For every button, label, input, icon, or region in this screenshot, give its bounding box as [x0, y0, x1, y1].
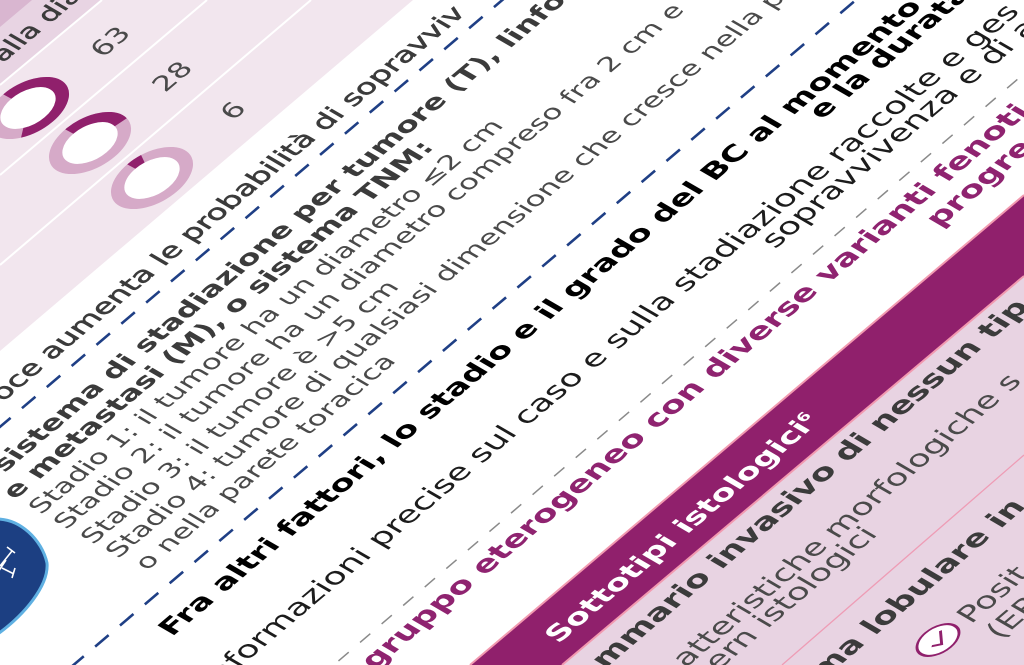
- heading: TNM staging line 2: e metastasi (M), o sistema TNM:: [0, 136, 440, 503]
- icon: blue badge: [0, 519, 47, 636]
- donut chart: 63 percent: [0, 73, 76, 143]
- subtype divider: [782, 455, 1024, 665]
- statement: staging factors line 1: Fra altri fattori, lo stadio e il grado del BC al momento: [151, 0, 929, 640]
- stage 1: Stadio 1: il tumore ha un diametro ≤2 cm: [22, 115, 510, 518]
- donut chart: 28 percent: [42, 108, 138, 178]
- stage 2: Stadio 2: il tumore ha un diametro compreso fra 2 cm e: [47, 0, 691, 533]
- icon: check mark: [909, 619, 967, 661]
- gray dashed divider: [317, 60, 1024, 665]
- panel: histological subtypes background: [562, 276, 1024, 665]
- banner: histological subtypes: Sottotipi istologici: [537, 416, 817, 647]
- survival value: 63: 63: [83, 22, 138, 61]
- banner: histological subtypes: [470, 195, 1024, 665]
- stage 4 line 2: o nella parete toracica: [128, 350, 403, 574]
- blue dashed divider 2: [70, 0, 870, 665]
- stage 4 line 1: Stadio 4: tumore di qualsiasi dimensione che cresce nella p: [99, 0, 792, 562]
- stage 3: Stadio 3: il tumore è >5 cm: [74, 276, 406, 548]
- panel: survival table background: [0, 0, 413, 351]
- donut chart: 6 percent: [104, 143, 200, 213]
- survival value: 6: 6: [213, 97, 253, 124]
- survival value: 28: 28: [145, 57, 200, 96]
- blue dashed divider 1: [0, 0, 520, 429]
- banner: histological subtypes: 6: [792, 409, 815, 425]
